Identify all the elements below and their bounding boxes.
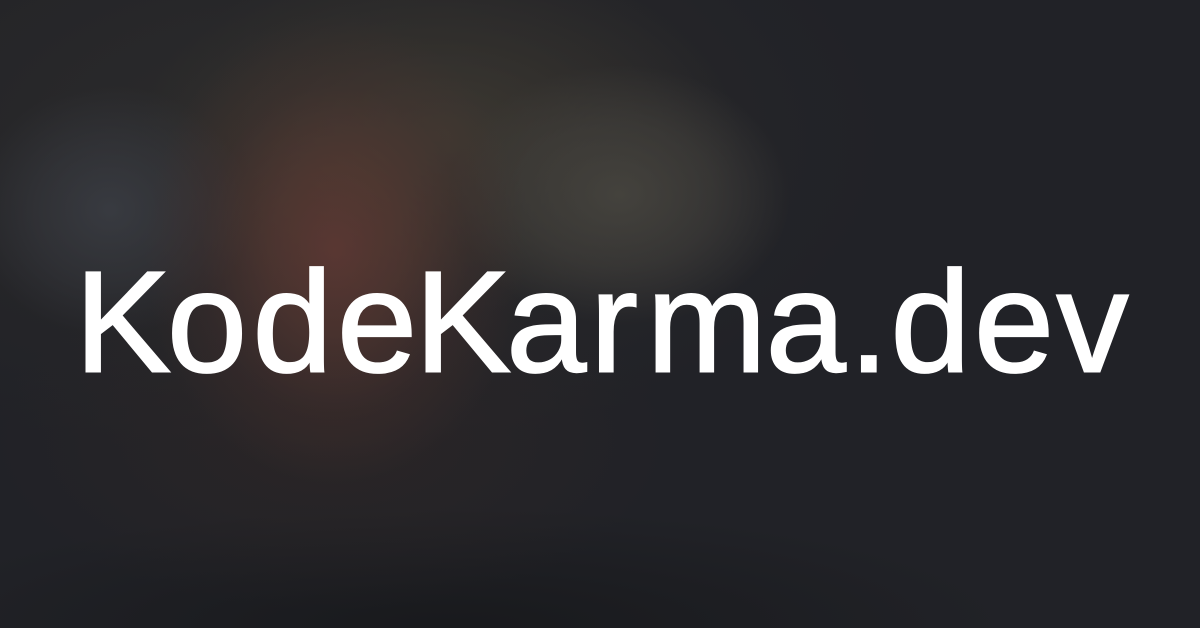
title: KodeKarma.dev: KodeKarma.dev (75, 242, 1129, 402)
